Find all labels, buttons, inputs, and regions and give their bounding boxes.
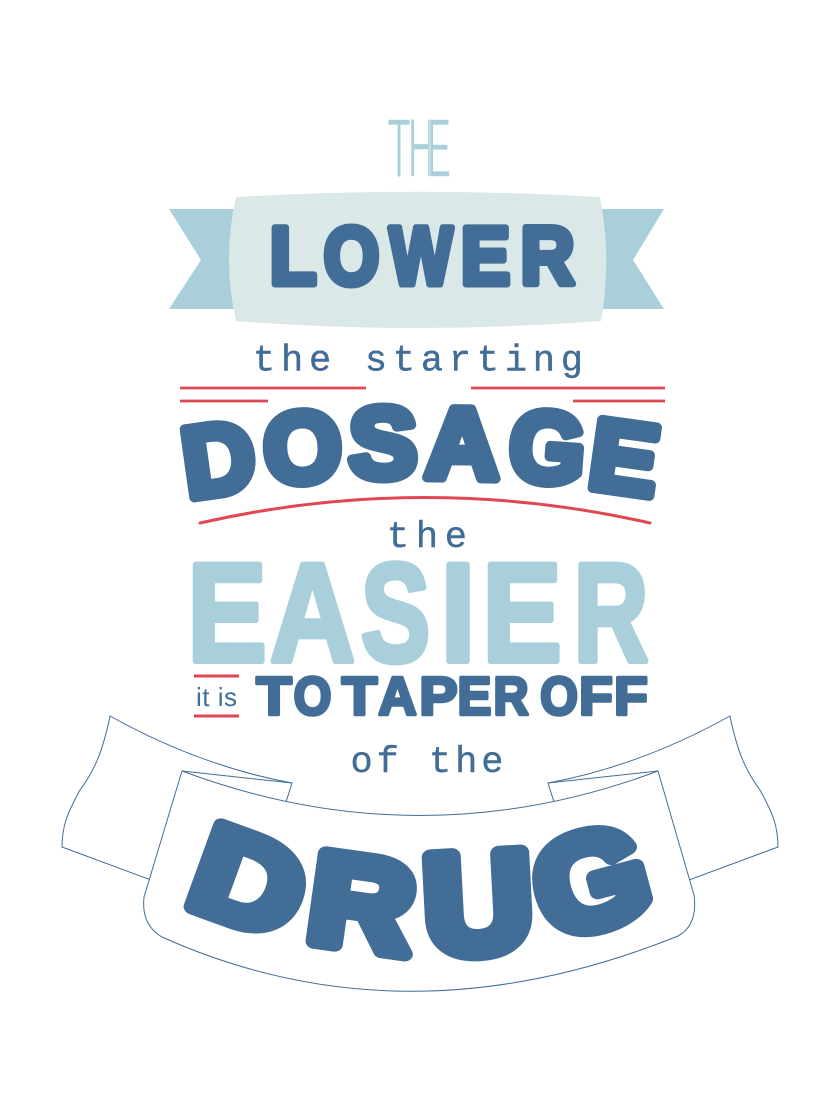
text: TO TAPER OFF: A — [378, 667, 417, 727]
word: DRUG: D — [173, 798, 324, 967]
text: TO TAPER OFF: O — [540, 665, 578, 726]
word: DOSAGE: O — [261, 390, 344, 506]
word: EASIER: S — [361, 536, 430, 692]
word: DOSAGE: D — [175, 399, 262, 520]
word: LOWER — [270, 209, 574, 302]
word: EASIER: A — [270, 535, 355, 691]
word: LOWER: E — [461, 209, 510, 302]
banner left tail — [62, 716, 292, 880]
word: LOWER: W — [390, 209, 453, 302]
red rules around it is — [194, 676, 239, 716]
word: DRUG — [173, 795, 665, 984]
red rules above DOSAGE — [180, 388, 665, 401]
red arc under DOSAGE — [200, 498, 650, 523]
text: TO TAPER OFF: O — [294, 665, 331, 726]
word: EASIER: E — [187, 534, 267, 691]
word: DOSAGE: A — [424, 388, 500, 500]
word: EASIER: I — [440, 535, 476, 691]
word: LOWER: L — [270, 209, 316, 302]
word: EASIER: E — [482, 534, 562, 691]
word: LOWER: R — [521, 210, 574, 302]
word: DRUG: R — [301, 825, 423, 981]
ribbon left tail — [169, 209, 245, 309]
word: DRUG: U — [420, 821, 536, 984]
text: TO TAPER OFF: F — [579, 666, 613, 726]
ribbon: LOWER — [169, 192, 664, 328]
word: DOSAGE: G — [506, 389, 589, 506]
text: TO TAPER OFF: R — [493, 665, 529, 726]
text: TO TAPER OFF: T — [342, 665, 377, 726]
word: EASIER: R — [574, 536, 648, 692]
text label: it is — [196, 682, 237, 712]
text: TO TAPER OFF: F — [614, 666, 648, 726]
text: the: the — [387, 517, 467, 559]
word: DOSAGE — [175, 388, 666, 520]
text: TO TAPER OFF: T — [256, 665, 292, 726]
word: DOSAGE: S — [349, 388, 417, 499]
word: DOSAGE: E — [583, 399, 666, 518]
bottom banner — [62, 716, 778, 991]
heading: THE: T — [387, 101, 411, 195]
text: it is — [194, 676, 239, 716]
banner right tail — [548, 716, 778, 880]
ribbon right tail — [590, 209, 664, 309]
heading: THE — [387, 100, 451, 195]
text: TO TAPER OFF — [256, 665, 648, 727]
word: DRUG: G — [518, 795, 665, 968]
banner fold right — [548, 771, 658, 783]
heading: THE: E — [427, 100, 451, 195]
ribbon centre panel — [229, 192, 606, 328]
heading: THE: H — [408, 100, 434, 195]
text: of the: of the — [350, 742, 504, 784]
banner main band — [144, 771, 695, 991]
text: the starting: the starting — [253, 340, 583, 382]
banner fold left — [182, 771, 292, 783]
text: TO TAPER OFF: P — [419, 666, 458, 726]
word: LOWER: O — [324, 210, 379, 302]
word: EASIER — [187, 534, 648, 692]
text: TO TAPER OFF: E — [457, 667, 491, 727]
